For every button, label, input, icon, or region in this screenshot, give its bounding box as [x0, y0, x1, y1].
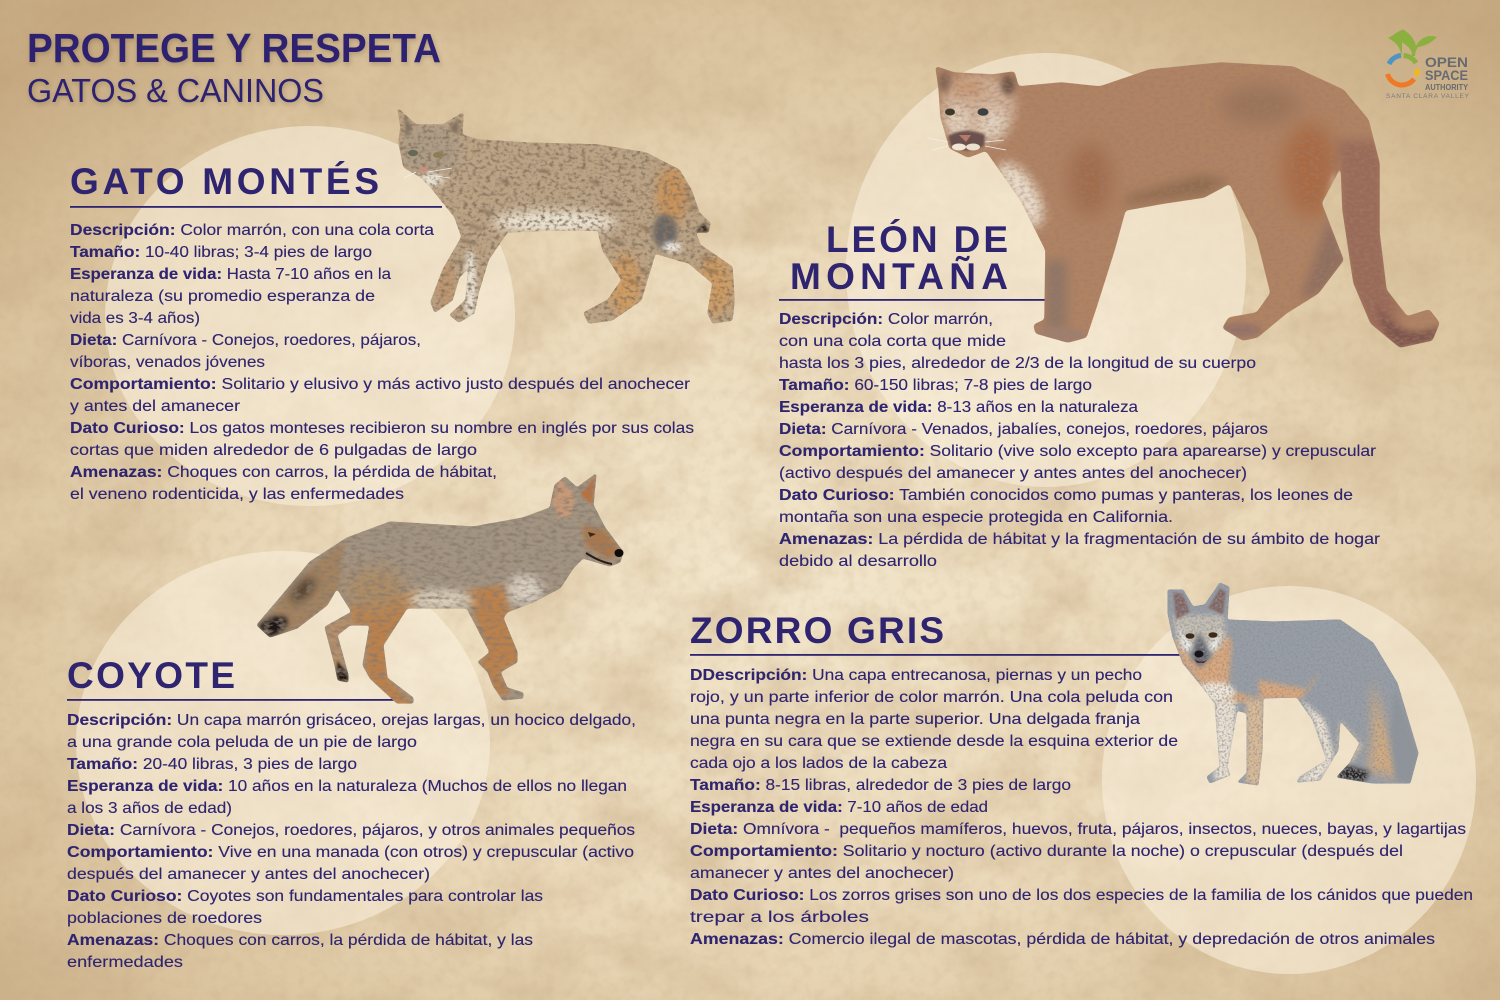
text block: león de montaña facts: debido al desarrollo	[779, 553, 937, 570]
heading rule	[779, 299, 1045, 301]
text block: león de montaña facts: Tamaño: 60-150 libras; 7-8 pies de largo	[779, 377, 1092, 394]
text block: gato montés facts: y antes del amanecer	[70, 398, 241, 415]
logo: Open Space Authority: SANTA CLARA VALLEY	[1386, 93, 1470, 100]
heading: zorro gris: ZORRO GRIS	[690, 610, 946, 651]
gray fox face details	[1186, 632, 1218, 663]
text block: coyote facts: Dieta: Carnívora - Conejos, roedores, pájaros, y otros animales pequeños	[67, 822, 635, 839]
text block: zorro gris facts: Dato Curioso: Los zorros grises son uno de los dos especies de la familia de los cánidos que pueden	[690, 887, 1473, 904]
heading: león de montaña: MONTAÑA	[790, 255, 1010, 297]
text block: gato montés facts: Tamaño: 10-40 libras; 3-4 pies de largo	[70, 244, 372, 261]
coyote face details	[586, 532, 624, 564]
text block: zorro gris facts	[690, 667, 1473, 948]
text block: zorro gris facts: Amenazas: Comercio ilegal de mascotas, pérdida de hábitat, y depredación de otros animales	[690, 931, 1435, 948]
illustration: bobcat	[398, 109, 734, 323]
heading: gato montés: GATO MONTÉS	[70, 161, 381, 202]
text block: gato montés facts: Amenazas: Choques con carros, la pérdida de hábitat,	[70, 464, 497, 481]
heading rule	[67, 699, 395, 701]
text block: león de montaña facts: Descripción: Color marrón,	[779, 311, 993, 328]
heading: león de montaña: LEÓN DE	[826, 218, 1010, 260]
illustration: coyote	[253, 474, 624, 705]
text block: león de montaña facts: Esperanza de vida: 8-13 años en la naturaleza	[779, 399, 1138, 416]
text block: coyote facts	[67, 712, 636, 971]
panel: gato montés	[70, 161, 694, 503]
heading rule	[690, 654, 1181, 656]
text block: coyote facts: Esperanza de vida: 10 años en la naturaleza (Muchos de ellos no llegan	[67, 778, 627, 795]
text block: zorro gris facts: rojo, y un parte inferior de color marrón. Una cola peluda con	[690, 689, 1173, 706]
text block: coyote facts: Dato Curioso: Coyotes son fundamentales para controlar las	[67, 888, 543, 905]
panel: zorro gris	[690, 610, 1473, 948]
heading: coyote: COYOTE	[67, 655, 237, 696]
illustration: mountain lion	[928, 63, 1440, 355]
text block: coyote facts: Amenazas: Choques con carros, la pérdida de hábitat, y las	[67, 932, 533, 949]
text block: gato montés facts: Esperanza de vida: Hasta 7-10 años en la	[70, 266, 391, 283]
text block: coyote facts: poblaciones de roedores	[67, 910, 262, 927]
logo: Open Space Authority: OPEN	[1425, 54, 1468, 70]
heading: león de montaña	[790, 218, 1010, 297]
text block: coyote facts: Tamaño: 20-40 libras, 3 pies de largo	[67, 756, 357, 773]
text block: zorro gris facts: amanecer y antes del anochecer)	[690, 865, 954, 882]
text block: zorro gris facts: Esperanza de vida: 7-10 años de edad	[690, 799, 988, 816]
text block: coyote facts: Comportamiento: Vive en una manada (con otros) y crepuscular (activo	[67, 844, 634, 861]
text block: zorro gris facts: trepar a los árboles	[690, 909, 869, 926]
text block: gato montés facts: Dieta: Carnívora - Conejos, roedores, pájaros,	[70, 332, 421, 349]
text block: zorro gris facts: una punta negra en la parte superior. Una delgada franja	[690, 711, 1140, 728]
title: PROTEGE Y RESPETA	[27, 25, 441, 71]
text block: gato montés facts: víboras, venados jóvenes	[70, 354, 265, 371]
text block: coyote facts: a una grande cola peluda de un pie de largo	[67, 734, 417, 751]
text block: zorro gris facts: Comportamiento: Solitario y nocturo (activo durante la noche) o crepuscular (después del	[690, 843, 1403, 860]
text block: gato montés facts	[70, 222, 694, 503]
heading rule	[70, 206, 442, 208]
text block: coyote facts: enfermedades	[67, 954, 183, 971]
text block: zorro gris facts: Tamaño: 8-15 libras, alrededor de 3 pies de largo	[690, 777, 1071, 794]
text block: gato montés facts: Comportamiento: Solitario y elusivo y más activo justo después del anochecer	[70, 376, 691, 393]
text block: zorro gris facts: Dieta: Omnívora - pequeños mamíferos, huevos, fruta, pájaros, insectos, nueces, bayas, y lagartijas	[690, 821, 1466, 838]
text block: león de montaña facts	[779, 311, 1381, 570]
illustration: gray fox	[1168, 583, 1420, 788]
mountain lion face details	[928, 108, 1006, 150]
text block: león de montaña facts: con una cola corta que mide	[779, 333, 1006, 350]
text block: león de montaña facts: Dato Curioso: También conocidos como pumas y panteras, los leones de	[779, 487, 1353, 504]
text block: coyote facts: a los 3 años de edad)	[67, 800, 232, 817]
text block: león de montaña facts: Amenazas: La pérdida de hábitat y la fragmentación de su ámbito de hogar	[779, 531, 1381, 548]
text block: gato montés facts: Dato Curioso: Los gatos monteses recibieron su nombre en inglés por sus colas	[70, 420, 694, 437]
text block: zorro gris facts: cada ojo a los lados de la cabeza	[690, 755, 947, 772]
title: GATOS & CANINOS	[27, 72, 324, 109]
logo: Open Space Authority: AUTHORITY	[1425, 82, 1468, 92]
panel: coyote	[67, 655, 636, 971]
text block: león de montaña facts: (activo después del amanecer y antes antes del anochecer)	[779, 465, 1247, 482]
text block: zorro gris facts: negra en su cara que se extiende desde la esquina exterior de	[690, 733, 1178, 750]
text block: zorro gris facts: DDescripción: Una capa entrecanosa, piernas y un pecho	[690, 667, 1142, 684]
text block: gato montés facts: el veneno rodenticida, y las enfermedades	[70, 486, 404, 503]
text block: gato montés facts: cortas que miden alrededor de 6 pulgadas de largo	[70, 442, 477, 459]
text block: león de montaña facts: hasta los 3 pies, alrededor de 2/3 de la longitud de su cuerpo	[779, 355, 1256, 372]
text block: gato montés facts: vida es 3-4 años)	[70, 310, 200, 327]
text block: gato montés facts: Descripción: Color marrón, con una cola corta	[70, 222, 434, 239]
text block: coyote facts: después del amanecer y antes del anochecer)	[67, 866, 430, 883]
bobcat face details	[404, 150, 452, 178]
logo: Open Space Authority	[1386, 30, 1470, 100]
panel: león de montaña	[779, 218, 1381, 570]
text block: león de montaña facts: montaña son una especie protegida en California.	[779, 509, 1173, 526]
text block: coyote facts: Descripción: Un capa marrón grisáceo, orejas largas, un hocico delgado,	[67, 712, 636, 729]
text block: león de montaña facts: Dieta: Carnívora - Venados, jabalíes, conejos, roedores, pájaros	[779, 421, 1268, 438]
text block: gato montés facts: naturaleza (su promedio esperanza de	[70, 288, 375, 305]
logo: Open Space Authority: SPACE	[1425, 67, 1468, 83]
title	[27, 25, 441, 109]
text block: león de montaña facts: Comportamiento: Solitario (vive solo excepto para aparearse) y crepuscular	[779, 443, 1377, 460]
